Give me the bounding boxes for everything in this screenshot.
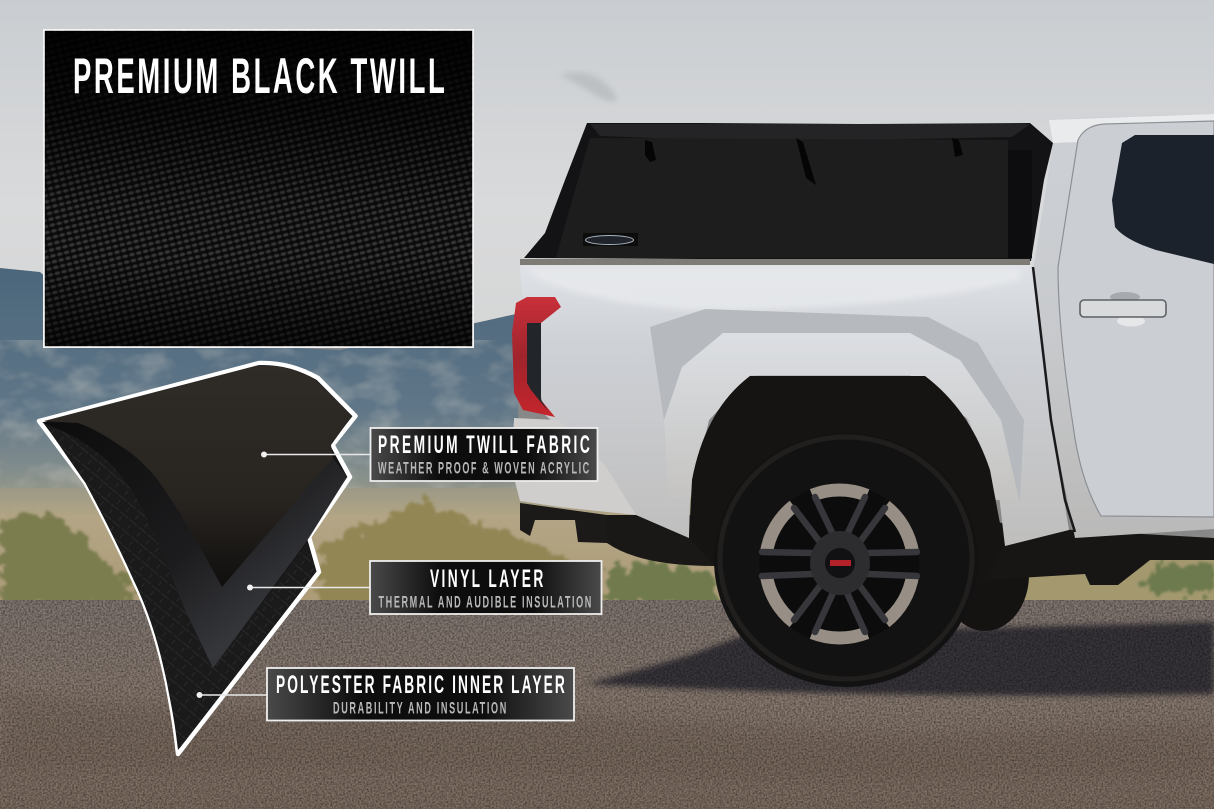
- truck with soft topper: [512, 114, 1214, 687]
- tail light: [512, 297, 561, 417]
- twill fabric layer: [44, 365, 352, 587]
- door panel: [1058, 121, 1214, 517]
- door handle: [1080, 292, 1166, 326]
- callout: vinyl layer: VINYL LAYER: [430, 566, 544, 593]
- twill fabric swatch panel: [44, 30, 473, 347]
- bed panel: [520, 265, 1069, 546]
- tire tread highlight: [720, 437, 972, 679]
- vinyl layer: [42, 422, 347, 668]
- wheel rim: [760, 484, 920, 644]
- cab underbody frame: [985, 525, 1214, 585]
- callout: vinyl layer: THERMAL AND AUDIBLE INSULATION: [378, 593, 591, 611]
- soft topper: [524, 123, 1053, 261]
- rear tire: [714, 433, 978, 687]
- cab body: [1034, 114, 1214, 538]
- callout: polyester fabric inner layer: [196, 668, 574, 720]
- cab roof highlight: [1049, 114, 1214, 143]
- bed highlight: [525, 268, 1020, 310]
- topper logo patch: [583, 233, 638, 246]
- title: PREMIUM BLACK TWILL: [73, 47, 445, 104]
- topper straps: [645, 138, 963, 185]
- inner polyester layer: [44, 423, 316, 750]
- rear bumper: [512, 418, 636, 515]
- fender shadow crease: [650, 309, 1024, 500]
- window: [1112, 135, 1214, 264]
- callout: polyester fabric inner layer: DURABILITY AND INSULATION: [333, 699, 506, 717]
- callout: premium twill fabric: PREMIUM TWILL FABRIC: [378, 432, 590, 459]
- spare tire: [607, 515, 715, 566]
- callout: vinyl layer: [247, 561, 602, 614]
- wheel well: [689, 376, 1004, 580]
- ground shadow under truck: [586, 622, 1214, 696]
- far-side tire: [941, 519, 1029, 631]
- black seam between bed and cab: [1033, 267, 1075, 532]
- fender flare: [664, 333, 1019, 500]
- wheel badge: [830, 560, 851, 566]
- hitch and frame: [520, 503, 607, 543]
- bed rail: [520, 259, 1030, 265]
- callout: premium twill fabric: [261, 428, 598, 481]
- callout: premium twill fabric: WEATHER PROOF & WOVEN ACRYLIC: [378, 459, 589, 477]
- layered material cross-section: [39, 363, 356, 754]
- callout: polyester fabric inner layer: POLYESTER FABRIC INNER LAYER: [276, 672, 565, 699]
